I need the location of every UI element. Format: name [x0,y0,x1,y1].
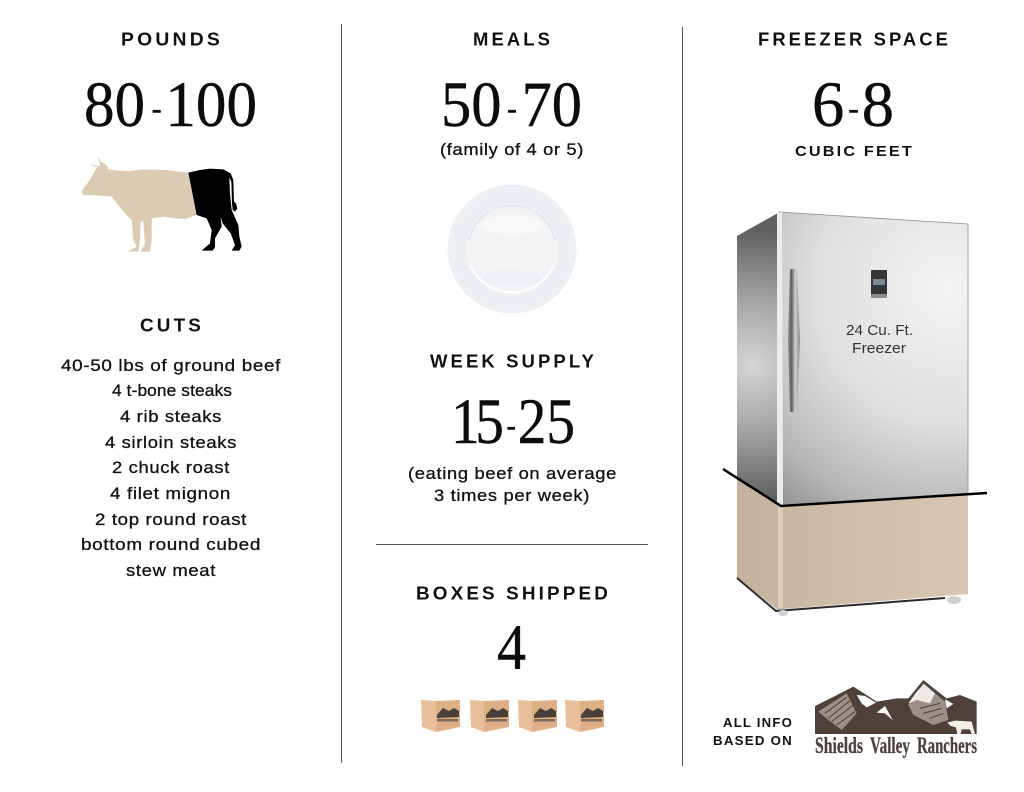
credit text: ALL INFO [723,715,793,730]
number: 80-100: 80 [84,69,149,141]
base shadow [737,578,945,611]
heading: week supply: WEEK SUPPLY [430,352,597,372]
note: eating frequency: 3 times per week) [434,486,590,505]
list: cuts [61,356,281,580]
logo wordmark: Valley [870,733,910,758]
number: 50-70: 70 [522,69,582,141]
list: cuts: 4 rib steaks [120,407,222,426]
divider: boxes section [376,544,648,546]
filled beige portion [737,480,968,610]
label: cubic feet: CUBIC FEET [795,143,914,160]
heading: pounds: POUNDS [121,30,223,50]
list: cuts: 4 t-bone steaks [112,381,232,400]
number: 50-70: 50 [441,69,506,141]
divider: left column [340,24,342,763]
list: cuts: stew meat [126,561,216,580]
panel: meals, supply and boxes [376,30,648,732]
icon: cow with hindquarter highlighted [82,157,242,252]
heading: freezer space: FREEZER SPACE [758,30,951,50]
freezer label: 24 Cu. Ft. [846,322,913,339]
freezer label: Freezer [852,340,906,357]
number: 15-25: - [507,407,516,443]
panel: freezer space [713,30,987,758]
number: 6-8: 6 [812,69,844,141]
note: family size: (family of 4 or 5) [440,140,584,159]
logo: Shields Valley Ranchers [815,680,977,758]
list: cuts: 2 chuck roast [112,458,230,477]
credit text [713,715,793,748]
number: 50-70: - [507,90,517,126]
freezer door [779,212,968,506]
freezer feet [778,596,961,616]
icon: white plate [448,184,576,314]
logo mountains [815,680,977,734]
number: 15-25: 25 [518,386,575,458]
number: 15-25: 15 [451,386,508,458]
number: 6-8: 8 [862,69,894,141]
icon: box 1 [421,700,460,732]
icon: box 4 [565,700,604,732]
list: cuts: 40-50 lbs of ground beef [61,356,281,375]
icon: four shipping boxes [421,700,604,732]
illustration: freezer with fill level [723,212,987,616]
note: eating frequency: (eating beef on average [408,464,617,483]
heading: cuts: CUTS [140,316,204,336]
heading: meals: MEALS [473,30,553,50]
number: 80-100: - [152,90,162,126]
credit text: BASED ON [713,733,793,748]
panel: pounds and cuts [61,30,281,580]
door edge highlight [777,212,783,506]
icon: box 2 [470,700,509,732]
freezer label [846,322,913,357]
icon: box 3 [518,700,557,732]
number: 6-8: - [848,90,859,126]
number: 4: 4 [497,612,526,684]
note: eating frequency [408,464,617,505]
freezer side panel [737,213,778,505]
list: cuts: 4 sirloin steaks [105,433,237,452]
logo wordmark: Ranchers [917,733,977,758]
fill level line [723,469,987,506]
number: 80-100: 100 [165,69,257,141]
logo wordmark: Shields [815,733,863,758]
control panel [871,270,887,298]
logo wordmark [815,733,977,758]
heading: boxes shipped: BOXES SHIPPED [416,584,611,604]
list: cuts: bottom round cubed [81,535,261,554]
list: cuts: 2 top round roast [95,510,247,529]
door handle [788,269,800,412]
list: cuts: 4 filet mignon [110,484,231,503]
divider: right column [682,27,684,766]
